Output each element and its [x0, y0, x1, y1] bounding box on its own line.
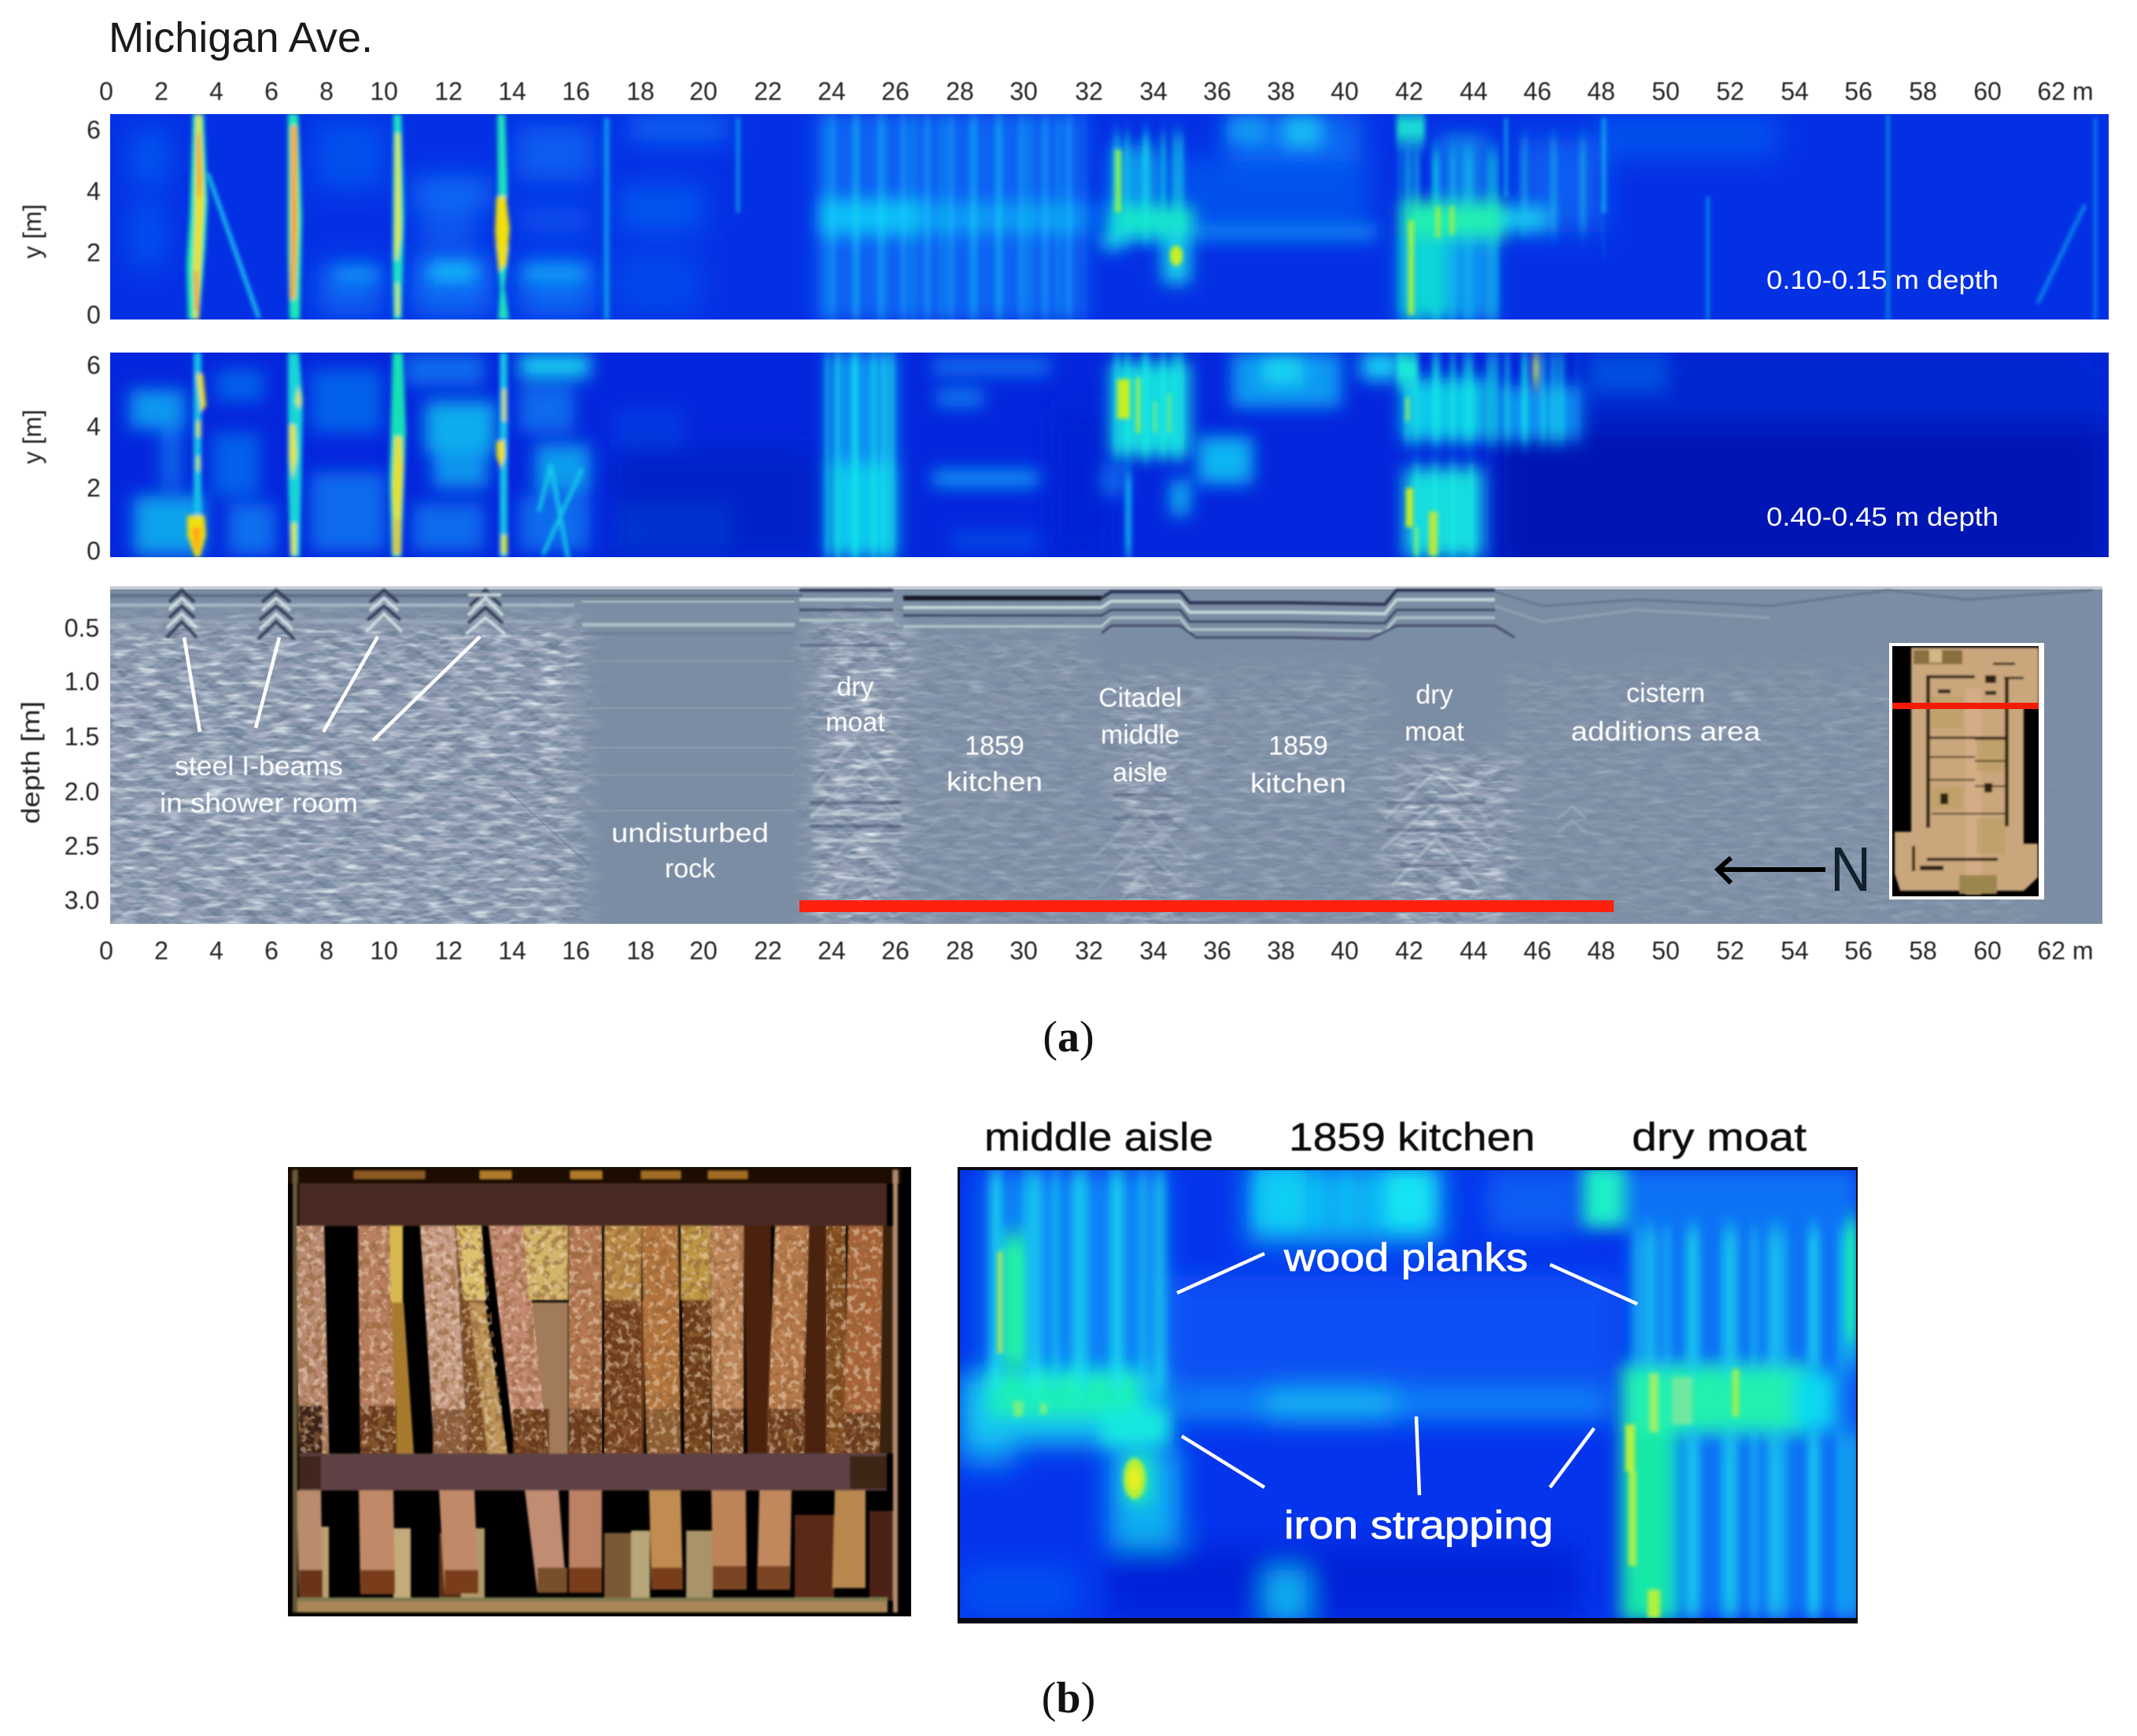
- top distance axis: 48: [1587, 77, 1615, 105]
- top distance axis: 26: [881, 77, 910, 105]
- distance axis below radargram: 10: [370, 936, 398, 965]
- caption (a): (a): [1043, 1013, 1094, 1062]
- distance axis below radargram: 8: [319, 936, 334, 965]
- distance axis below radargram: [99, 936, 2094, 965]
- distance axis below radargram: 58: [1909, 936, 1937, 965]
- top distance axis: 6: [264, 77, 279, 105]
- top distance axis: 44: [1460, 77, 1488, 105]
- top distance axis: [99, 77, 2094, 105]
- depth axis: 0.5: [65, 614, 99, 642]
- y axis: slice 2: 4: [87, 412, 101, 441]
- depth label: 0.10-0.15 m depth: [1766, 265, 1999, 294]
- depth axis: [17, 614, 99, 914]
- iron straps: [288, 1167, 902, 1184]
- label: iron strapping: iron strapping: [1284, 1503, 1553, 1547]
- depth axis: 1.0: [65, 667, 99, 696]
- pointer lines: iron strapping: [1182, 1417, 1594, 1495]
- top distance axis: 42: [1395, 77, 1423, 105]
- feature labels: rock: [665, 854, 716, 884]
- inset: floor plan with section line: [1889, 643, 2044, 899]
- feature labels: 1859: [965, 731, 1024, 761]
- top distance axis: 34: [1139, 77, 1168, 105]
- top distance axis: 52: [1716, 77, 1744, 105]
- distance axis below radargram: 14: [498, 936, 526, 965]
- y axis: slice 1: 4: [87, 177, 101, 205]
- distance axis below radargram: 28: [946, 936, 974, 965]
- distance axis below radargram: 16: [562, 936, 590, 965]
- top distance axis: 60: [1973, 77, 2002, 105]
- panel: radar slice 0.40-0.45 m depth: [110, 353, 2109, 574]
- top distance axis: 22: [754, 77, 782, 105]
- distance axis below radargram: 2: [154, 936, 168, 965]
- distance axis below radargram: 18: [626, 936, 655, 965]
- faint rock strata: [504, 661, 795, 866]
- distance axis below radargram: 4: [209, 936, 223, 965]
- y axis: slice 2: 0: [87, 537, 101, 565]
- diffraction hyperbolas: [167, 590, 1586, 921]
- top distance axis: 32: [1075, 77, 1103, 105]
- steel beam anomalies: [186, 114, 510, 319]
- top distance axis: 0: [99, 77, 113, 105]
- top distance axis: 46: [1523, 77, 1552, 105]
- feature labels: moat: [1404, 717, 1464, 747]
- red extent bar: [799, 900, 1614, 912]
- distance axis below radargram: 42: [1395, 936, 1423, 965]
- distance axis below radargram: 20: [689, 936, 718, 965]
- y axis: slice 2: [18, 351, 101, 565]
- y axis: slice 1: 2: [87, 238, 101, 267]
- caption (b): (b): [1042, 1674, 1095, 1723]
- top distance axis: 18: [626, 77, 655, 105]
- north arrow: [1718, 834, 1871, 904]
- top distance axis: 36: [1203, 77, 1231, 105]
- feature labels: kitchen: [947, 767, 1043, 797]
- pointer lines: wood planks: [1177, 1254, 1637, 1304]
- top distance axis: 2: [154, 77, 168, 105]
- distance axis below radargram: 46: [1523, 936, 1552, 965]
- top distance axis: 28: [946, 77, 974, 105]
- depth axis: 3.0: [65, 886, 99, 914]
- top distance axis: 12: [434, 77, 463, 105]
- y axis: slice 1: y [m]: [18, 204, 46, 259]
- feature labels: undisturbed: [611, 818, 769, 848]
- distance axis below radargram: 56: [1844, 936, 1873, 965]
- feature labels: steel I-beams: [175, 752, 343, 781]
- wood planks, lower: [297, 1490, 866, 1597]
- north arrow: N: [1830, 834, 1871, 904]
- y axis: slice 1: [18, 116, 101, 329]
- labels above panel b heat map: 1859 kitchen: [1289, 1115, 1535, 1159]
- feature labels: [160, 672, 1761, 884]
- top distance axis: 8: [319, 77, 334, 105]
- labels above panel b heat map: [984, 1115, 1807, 1159]
- panel: photo of wood planks and iron strapping: [288, 1167, 911, 1616]
- feature labels: 1859: [1268, 731, 1328, 761]
- steel beam anomalies: [187, 353, 582, 559]
- distance axis below radargram: 38: [1267, 936, 1295, 965]
- top distance axis: 62 m: [2037, 77, 2094, 105]
- near-surface reflection bands: [110, 590, 2093, 645]
- depth axis: depth [m]: [17, 701, 45, 824]
- distance axis below radargram: 36: [1203, 936, 1231, 965]
- distance axis below radargram: 0: [99, 936, 113, 965]
- distance axis below radargram: 62 m: [2037, 936, 2094, 965]
- depth axis: 2.5: [65, 832, 99, 860]
- y axis: slice 2: 2: [87, 474, 101, 502]
- y axis: slice 2: y [m]: [18, 409, 46, 464]
- distance axis below radargram: 44: [1460, 936, 1488, 965]
- feature labels: Citadel: [1098, 683, 1182, 713]
- distance axis below radargram: 12: [434, 936, 463, 965]
- distance axis below radargram: 32: [1075, 936, 1103, 965]
- distance axis below radargram: 40: [1331, 936, 1359, 965]
- top distance axis: 14: [498, 77, 526, 105]
- top distance axis: 30: [1009, 77, 1038, 105]
- distance axis below radargram: 52: [1716, 936, 1744, 965]
- pointer lines to steel beams: [184, 637, 480, 741]
- wood planks, upper: [296, 1226, 893, 1453]
- distance axis below radargram: 54: [1781, 936, 1809, 965]
- top distance axis: 38: [1267, 77, 1295, 105]
- distance axis below radargram: 50: [1652, 936, 1680, 965]
- feature labels: cistern: [1626, 678, 1705, 708]
- top distance axis: 56: [1844, 77, 1873, 105]
- top distance axis: 20: [689, 77, 718, 105]
- top distance axis: 58: [1909, 77, 1937, 105]
- depth axis: 2.0: [65, 778, 99, 806]
- feature labels: dry: [1415, 680, 1453, 710]
- labels above panel b heat map: middle aisle: [984, 1115, 1213, 1159]
- top distance axis: 40: [1331, 77, 1359, 105]
- top distance axis: 4: [209, 77, 223, 105]
- title: Michigan Ave.: [109, 14, 373, 61]
- feature labels: in shower room: [160, 789, 358, 818]
- depth label: 0.40-0.45 m depth: [1766, 502, 1999, 531]
- distance axis below radargram: 6: [264, 936, 279, 965]
- feature labels: additions area: [1570, 717, 1761, 747]
- plank rust bottoms: [299, 1405, 880, 1453]
- lower section backing: [321, 1511, 893, 1601]
- panel: radargram profile: [110, 586, 2102, 924]
- feature labels: moat: [825, 707, 885, 737]
- y axis: slice 2: 6: [87, 351, 101, 379]
- feature labels: aisle: [1113, 758, 1168, 788]
- labels above panel b heat map: dry moat: [1632, 1115, 1807, 1159]
- distance axis below radargram: 26: [881, 936, 910, 965]
- top distance axis: 10: [370, 77, 398, 105]
- label: wood planks: wood planks: [1283, 1236, 1528, 1280]
- distance axis below radargram: 34: [1139, 936, 1168, 965]
- frame edges: [297, 1601, 888, 1612]
- y axis: slice 1: 6: [87, 116, 101, 144]
- distance axis below radargram: 30: [1009, 936, 1038, 965]
- top distance axis: 54: [1781, 77, 1809, 105]
- distance axis below radargram: 22: [754, 936, 782, 965]
- panel: zoomed radar slice: [958, 1165, 1858, 1625]
- top distance axis: 16: [562, 77, 590, 105]
- feature labels: middle: [1101, 720, 1179, 750]
- distance axis below radargram: 24: [818, 936, 846, 965]
- panel: radar slice 0.10-0.15 m depth: [110, 114, 2109, 319]
- distance axis below radargram: 48: [1587, 936, 1615, 965]
- distance axis below radargram: 60: [1973, 936, 2002, 965]
- y axis: slice 1: 0: [87, 301, 101, 329]
- top distance axis: 50: [1652, 77, 1680, 105]
- depth axis: 1.5: [65, 722, 99, 751]
- subsurface texture: [110, 586, 2102, 924]
- feature labels: kitchen: [1250, 769, 1346, 799]
- feature labels: dry: [836, 672, 874, 702]
- top distance axis: 24: [818, 77, 846, 105]
- rust speckle: [296, 1226, 894, 1453]
